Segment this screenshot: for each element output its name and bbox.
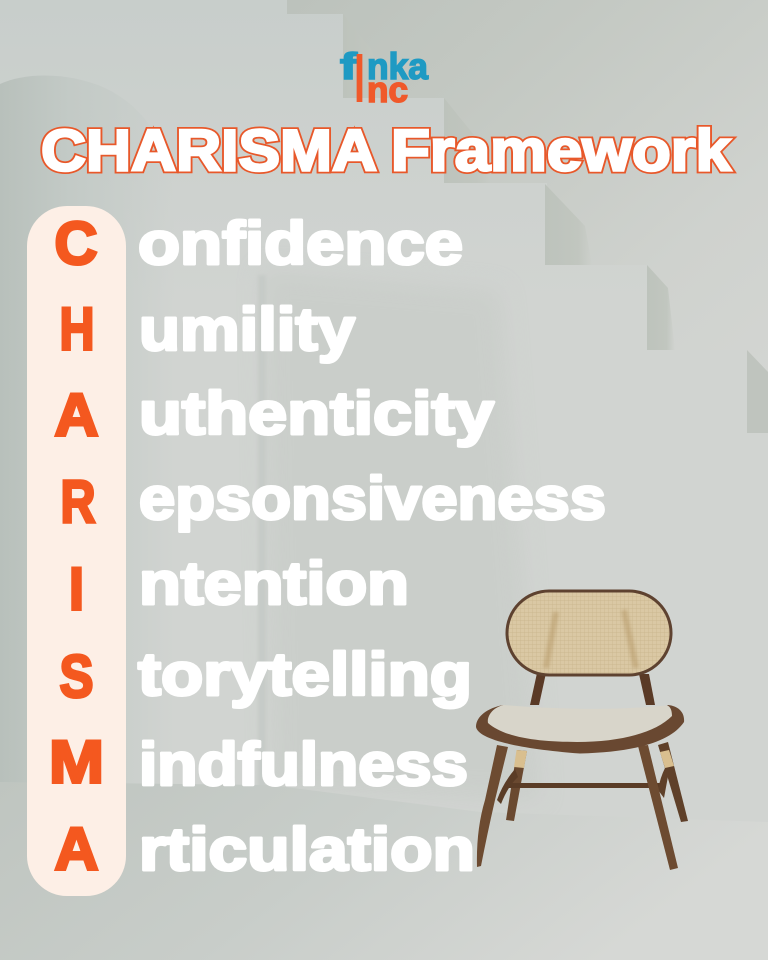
stretcher (508, 783, 660, 788)
logo: finka inc: I (354, 39, 365, 117)
binding wraps (514, 750, 527, 768)
acronym letters: H (60, 296, 94, 362)
seat frame (476, 705, 684, 754)
framework words: torytelling (138, 641, 472, 708)
framework words (138, 210, 606, 883)
backrest (507, 591, 671, 675)
acronym letters: A (54, 816, 98, 882)
back posts (530, 673, 546, 705)
framework words: uthenticity (139, 380, 495, 447)
floor (0, 782, 768, 960)
panel: acronym pill (27, 206, 126, 896)
top left wall tone (0, 0, 768, 300)
title: CHARISMA (41, 118, 377, 184)
logo: finka inc: nka (367, 46, 428, 87)
seat cushion (488, 705, 672, 742)
title (41, 118, 732, 184)
logo: finka inc: f (340, 46, 358, 87)
framework words: indfulness (139, 731, 468, 798)
framework words: epsonsiveness (139, 465, 606, 532)
title: Framework (391, 118, 732, 184)
framework words: rticulation (139, 816, 475, 883)
stair riser shadows (343, 14, 768, 433)
column seam shadow (262, 270, 540, 800)
acronym letters: M (49, 728, 104, 796)
logo: finka inc: nc (367, 69, 408, 110)
acronym letters: I (69, 556, 84, 622)
acronym letters: R (60, 468, 96, 536)
front legs (477, 745, 508, 867)
back legs (506, 750, 527, 821)
acronym letters: C (54, 210, 98, 277)
title: CHARISMA (41, 118, 377, 184)
framework words: ntention (139, 550, 409, 617)
acronym letters: S (60, 643, 94, 710)
upper wall above stairs (287, 0, 768, 433)
acronym letters (49, 210, 104, 882)
framework words: umility (139, 296, 356, 363)
acronym letters: A (54, 382, 98, 448)
icon: chair (476, 591, 688, 870)
title: Framework (391, 118, 732, 184)
framework words: onfidence (138, 210, 463, 277)
left arch column (0, 75, 175, 785)
logo: finka inc (340, 39, 428, 117)
